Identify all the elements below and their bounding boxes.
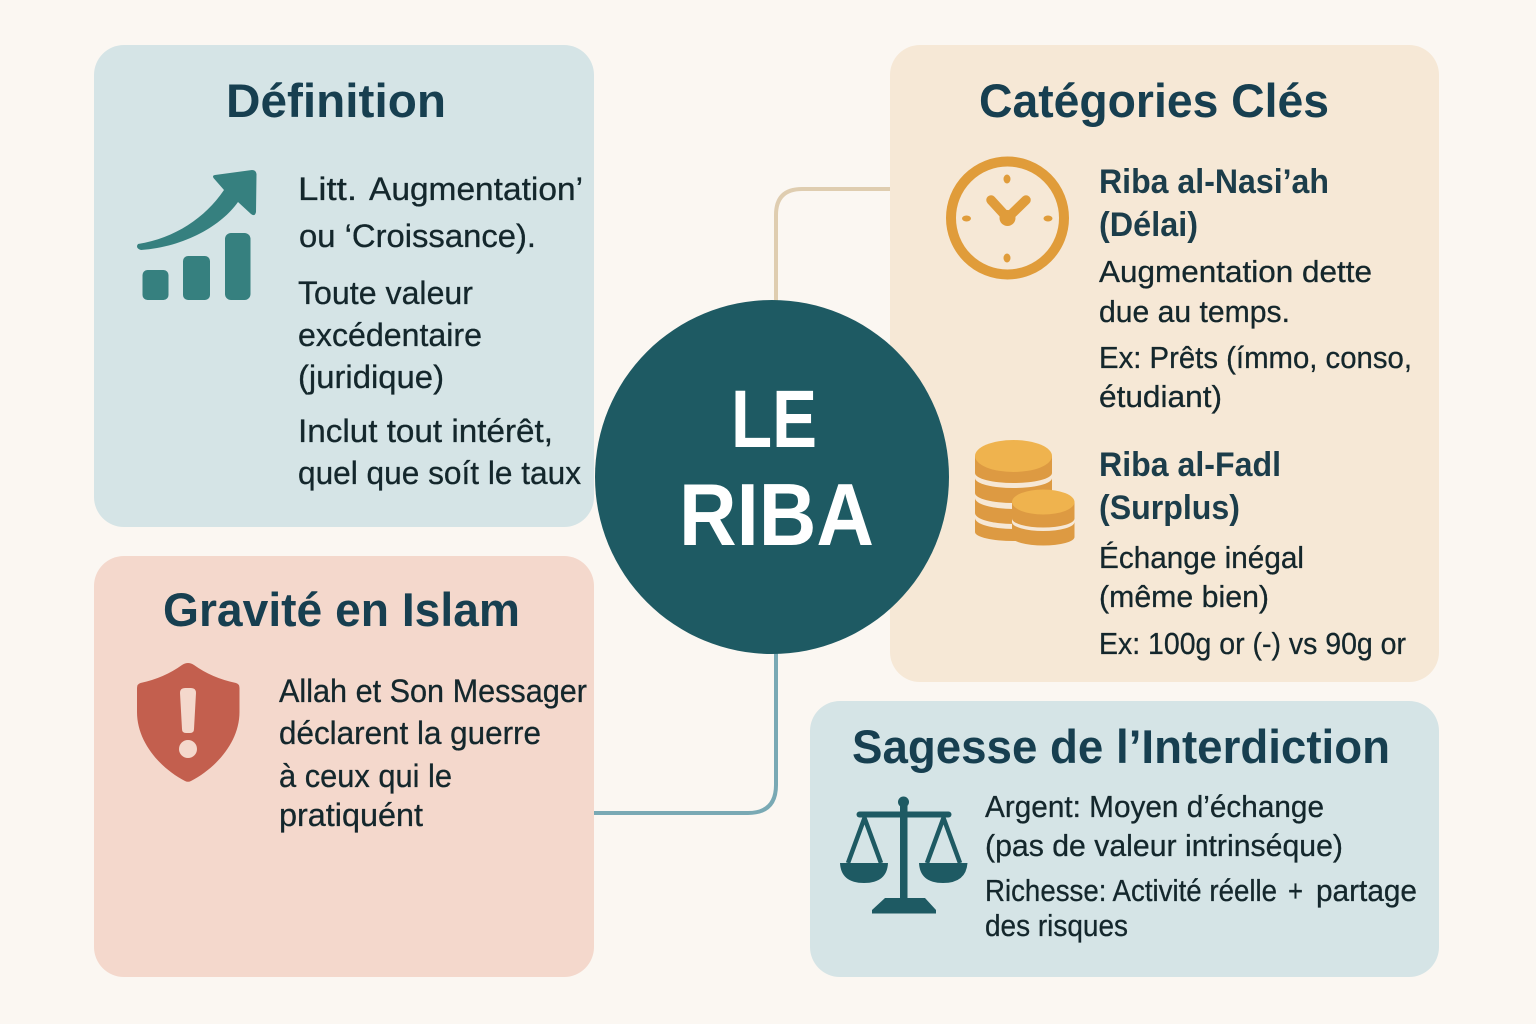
definition text: ou ‘Croissance). <box>299 218 536 254</box>
heading: gravité en islam: Gravité en Islam <box>163 583 520 636</box>
central title: RIBA <box>679 465 874 564</box>
riba al-nasi'ah text: Augmentation dette <box>1099 254 1372 289</box>
riba al-nasi'ah text: due au temps. <box>1099 294 1290 329</box>
heading: sagesse de l'interdiction: Sagesse de l’Interdiction <box>852 720 1390 773</box>
definition text: quel que soít le taux <box>298 455 581 491</box>
gravité text: à ceux qui le <box>279 758 452 794</box>
riba al-nasi'ah text: (Délai) <box>1099 206 1198 244</box>
icon: balance scale <box>840 796 968 914</box>
icon: growth chart with arrow <box>137 170 256 300</box>
heading: définition: Définition <box>226 74 446 127</box>
panel: gravité en islam <box>94 556 594 977</box>
gravité text <box>279 673 587 833</box>
definition text: (juridique) <box>298 359 444 395</box>
riba al-nasi'ah text <box>1099 163 1412 414</box>
definition text: Litt. <box>298 171 357 207</box>
connector: centre to catégories <box>776 189 892 304</box>
central title <box>679 374 874 564</box>
riba al-fadl text: (même bien) <box>1099 579 1269 614</box>
connector: centre to sagesse and gravité <box>594 650 776 813</box>
riba al-fadl text: Ex: 100g or (-) vs 90g or <box>1099 626 1406 661</box>
sagesse text: partage <box>1316 873 1417 908</box>
sagesse text: Argent: Moyen d’échange <box>985 789 1324 824</box>
panel: définition <box>94 45 594 527</box>
gravité text: Allah et Son Messager <box>279 673 587 709</box>
definition text: Inclut tout intérêt, <box>298 413 553 449</box>
riba al-nasi'ah text: étudiant) <box>1099 379 1222 414</box>
icon: warning shield <box>137 663 240 782</box>
panel: sagesse de l'interdiction <box>810 701 1439 977</box>
heading: catégories clés: Catégories Clés <box>979 74 1329 127</box>
icon: coin stacks <box>975 440 1074 546</box>
panel: catégories clés <box>890 45 1439 682</box>
riba al-fadl text: Échange inégal <box>1099 540 1304 575</box>
sagesse text: Richesse: Activité réelle <box>985 873 1277 908</box>
gravité text: pratiquént <box>279 797 423 833</box>
definition text: excédentaire <box>298 317 482 353</box>
gravité text: déclarent la guerre <box>279 715 541 751</box>
definition text: Augmentation’ <box>369 171 583 207</box>
definition text: Toute valeur <box>298 275 473 311</box>
sagesse text: des risques <box>985 908 1128 943</box>
sagesse text <box>985 789 1417 943</box>
sagesse text: + <box>1288 873 1303 908</box>
riba al-fadl text <box>1099 446 1406 661</box>
riba al-nasi'ah text: Ex: Prêts (ímmo, conso, <box>1099 340 1412 375</box>
riba al-nasi'ah text: Riba al-Nasi’ah <box>1099 163 1329 201</box>
definition text <box>298 171 583 491</box>
icon: clock <box>951 162 1064 274</box>
riba al-fadl text: Riba al-Fadl <box>1099 446 1281 484</box>
sagesse text: (pas de valeur intrinséque) <box>985 828 1343 863</box>
central title: LE <box>731 374 817 465</box>
central circle: le riba <box>595 300 949 654</box>
riba al-fadl text: (Surplus) <box>1099 489 1240 527</box>
